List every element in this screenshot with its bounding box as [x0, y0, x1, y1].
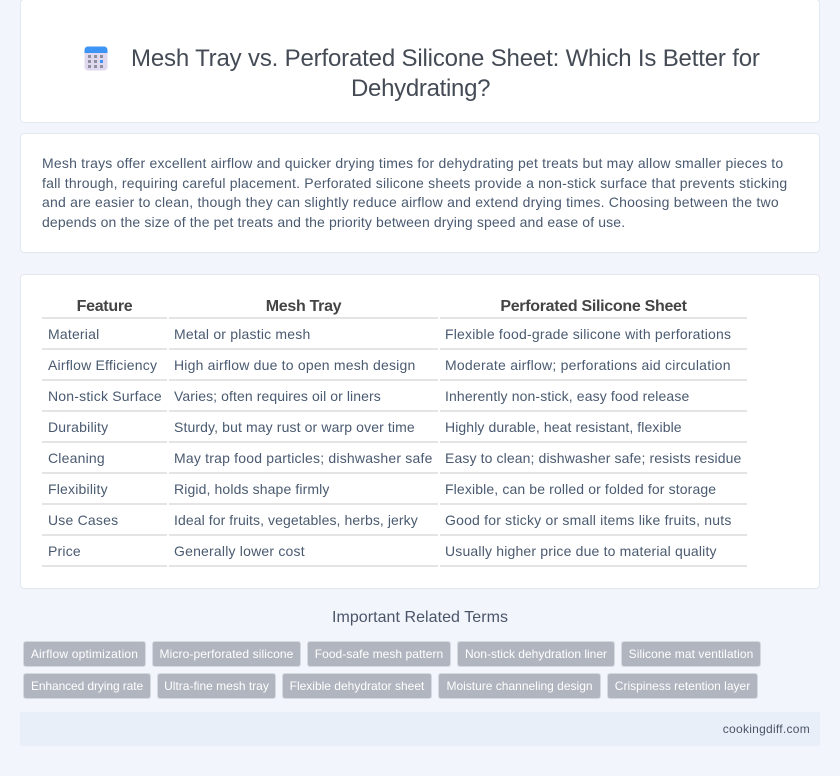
panel: summary	[20, 133, 820, 253]
icon: calendar	[84, 46, 108, 70]
row: Flexibility: Flexibility	[48, 481, 108, 497]
tag	[307, 641, 451, 667]
table header: Mesh Tray: Mesh Tray	[266, 298, 341, 315]
tag	[438, 673, 601, 699]
tag: Moisture channeling design	[446, 679, 593, 693]
tag	[23, 641, 146, 667]
tag: Non-stick dehydration liner	[465, 647, 607, 661]
row: Flexibility	[48, 481, 716, 497]
summary text	[42, 155, 787, 230]
row: Cleaning	[48, 450, 741, 466]
row: Cleaning: Cleaning	[48, 450, 105, 466]
row: Use Cases: Good for sticky or small items like fruits, nuts	[445, 512, 732, 528]
row: Price: Generally lower cost	[174, 543, 305, 559]
row: Airflow Efficiency	[48, 357, 731, 373]
title	[131, 45, 760, 102]
summary text: fall through, requiring careful placement. Perforated silicone sheets provide a non-stick surface that prevents sticking	[42, 175, 787, 191]
row: Material	[48, 326, 731, 342]
row: Use Cases: Use Cases	[48, 512, 118, 528]
title: Mesh Tray vs. Perforated Silicone Sheet: Which Is Better for	[131, 45, 760, 72]
summary text: Mesh trays offer excellent airflow and quicker drying times for dehydrating pet treats but may allow smaller pieces to	[42, 155, 783, 171]
summary text: and are easier to clean, though they can slightly reduce airflow and extend drying times. Choosing between the two	[42, 194, 779, 210]
row: Use Cases	[48, 512, 732, 528]
tag: Airflow optimization	[31, 647, 138, 661]
row: Cleaning: Easy to clean; dishwasher safe; resists residue	[445, 450, 741, 466]
row: Material: Flexible food-grade silicone with perforations	[445, 326, 731, 342]
footer bar	[20, 712, 820, 746]
row: Flexibility: Rigid, holds shape firmly	[174, 481, 330, 497]
row: Flexibility: Flexible, can be rolled or folded for storage	[445, 481, 716, 497]
heading: related terms: Important Related Terms	[332, 609, 508, 626]
tag	[23, 673, 151, 699]
summary text: depends on the size of the pet treats and the priority between drying speed and ease of use.	[42, 214, 625, 230]
title: Dehydrating?	[351, 75, 490, 102]
row: Durability: Highly durable, heat resistant, flexible	[445, 419, 682, 435]
panel: header	[20, 0, 820, 123]
tag	[457, 641, 615, 667]
tag	[621, 641, 761, 667]
table header: Feature: Feature	[77, 298, 132, 315]
tag: Food-safe mesh pattern	[315, 647, 443, 661]
row: Non-stick Surface: Inherently non-stick, easy food release	[445, 388, 689, 404]
tag	[607, 673, 758, 699]
row: Price: Price	[48, 543, 81, 559]
row: Airflow Efficiency: Moderate airflow; perforations aid circulation	[445, 357, 731, 373]
row: Non-stick Surface	[48, 388, 689, 404]
tag: Silicone mat ventilation	[629, 647, 753, 661]
row: Non-stick Surface: Varies; often requires oil or liners	[174, 388, 381, 404]
panel: comparison table	[20, 274, 820, 589]
tag: Micro-perforated silicone	[160, 647, 293, 661]
row: Airflow Efficiency: Airflow Efficiency	[48, 357, 157, 373]
tag: Flexible dehydrator sheet	[290, 679, 424, 693]
tag	[282, 673, 432, 699]
footer bar: cookingdiff.com	[723, 722, 810, 736]
row: Durability: Durability	[48, 419, 108, 435]
tag: Ultra-fine mesh tray	[164, 679, 269, 693]
row: Durability: Sturdy, but may rust or warp over time	[174, 419, 415, 435]
row: Non-stick Surface: Non-stick Surface	[48, 388, 162, 404]
tag	[152, 641, 301, 667]
row: Material: Material	[48, 326, 99, 342]
tag: Crispiness retention layer	[615, 679, 750, 693]
row: Price: Usually higher price due to material quality	[445, 543, 717, 559]
table header: Perforated Silicone Sheet: Perforated Silicone Sheet	[500, 298, 687, 315]
tag	[157, 673, 276, 699]
row: Cleaning: May trap food particles; dishwasher safe	[174, 450, 433, 466]
row: Airflow Efficiency: High airflow due to open mesh design	[174, 357, 415, 373]
tag: Enhanced drying rate	[31, 679, 143, 693]
row: Durability	[48, 419, 682, 435]
row: Price	[48, 543, 717, 559]
row: Use Cases: Ideal for fruits, vegetables, herbs, jerky	[174, 512, 418, 528]
row: Material: Metal or plastic mesh	[174, 326, 310, 342]
